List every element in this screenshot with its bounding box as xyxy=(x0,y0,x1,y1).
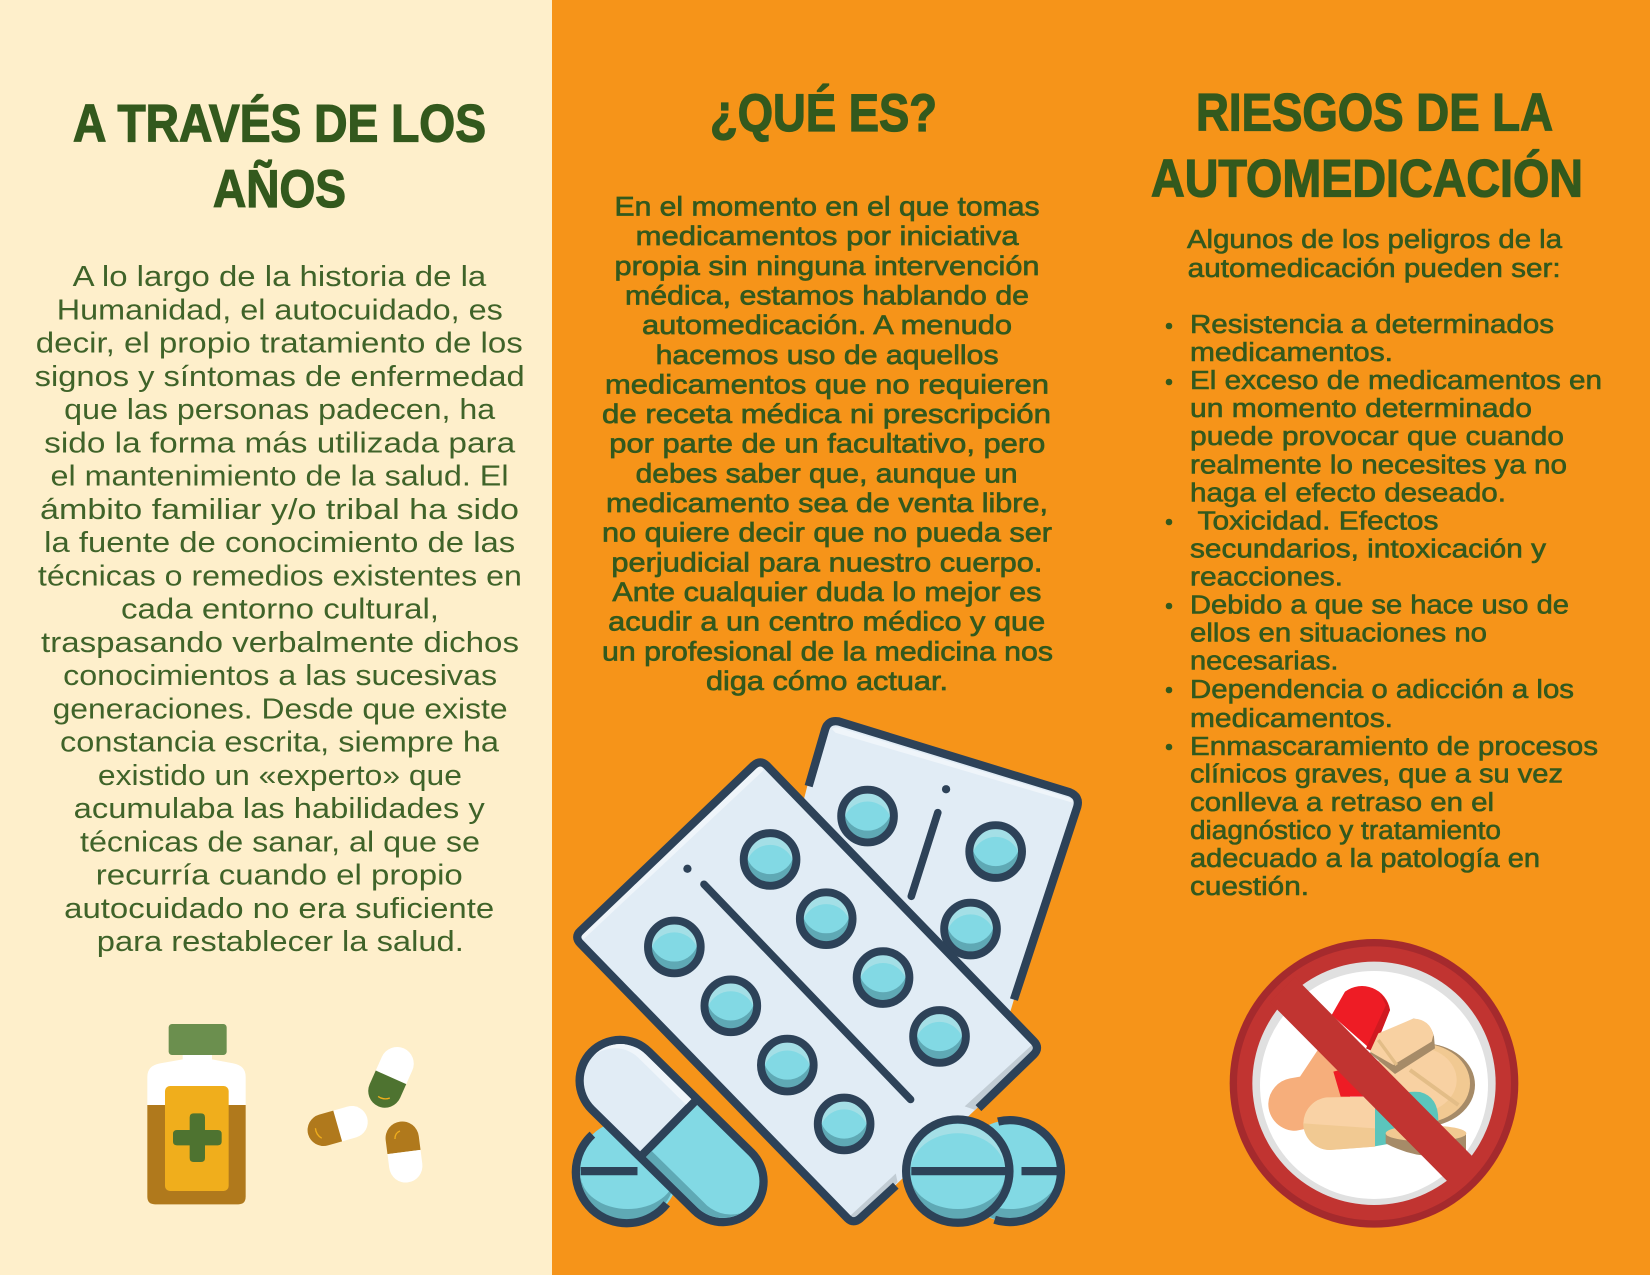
text block: history: técnicas o remedios existentes en xyxy=(38,560,522,592)
text block: definition: En el momento en el que tomas xyxy=(614,192,1040,222)
text block: history: conocimientos a las sucesivas xyxy=(63,660,497,692)
text block: history: cada entorno cultural, xyxy=(121,594,439,626)
front blister pack xyxy=(577,762,1037,1221)
list: risks: necesarias. xyxy=(1190,648,1338,676)
text block: history: sido la forma más utilizada para xyxy=(44,427,515,459)
list: risks: cuestión. xyxy=(1190,873,1309,901)
list: risks: adecuado a la patología en xyxy=(1190,845,1540,873)
list: risks: un momento determinado xyxy=(1190,395,1532,423)
capsule xyxy=(557,1017,786,1245)
text block: history: ámbito familiar y/o tribal ha sido xyxy=(40,494,519,526)
text block: intro to risks: automedicación pueden ser: xyxy=(1188,255,1561,283)
heading: a través de los años xyxy=(73,94,486,219)
right back tablet xyxy=(960,1120,1061,1222)
text block: history: técnicas de sanar, al que se xyxy=(80,826,480,858)
icon: no pills prohibition sign xyxy=(1230,939,1518,1228)
list: risks: Debido a que se hace uso de xyxy=(1190,592,1569,620)
text block: history: la fuente de conocimiento de las xyxy=(44,527,515,559)
text block: definition: automedicación. A menudo xyxy=(642,310,1012,340)
text block: definition: medicamento sea de venta libre, xyxy=(606,488,1048,518)
list: risks: medicamentos. xyxy=(1190,705,1393,733)
right front tablet xyxy=(906,1119,1009,1223)
list: risks: secundarios, intoxicación y xyxy=(1190,536,1546,564)
list: risks: reacciones. xyxy=(1190,564,1343,592)
list: risks: haga el efecto deseado. xyxy=(1190,479,1506,507)
text block: history: acumulaba las habilidades y xyxy=(74,793,486,825)
text block: history: generaciones. Desde que existe xyxy=(53,693,508,725)
heading: riesgos de la automedicación: RIESGOS DE LA xyxy=(1196,84,1553,142)
text block: definition: acudir a un centro médico y que xyxy=(608,607,1045,637)
text block: definition xyxy=(602,192,1053,696)
text block: history: recurría cuando el propio xyxy=(96,860,463,892)
icon: three capsules xyxy=(304,1042,424,1185)
text block: definition: no quiere decir que no pueda ser xyxy=(602,518,1052,548)
text block: definition: hacemos uso de aquellos xyxy=(656,340,999,370)
text block: definition: médica, estamos hablando de xyxy=(625,280,1029,310)
text block: definition: diga cómo actuar. xyxy=(706,666,948,696)
text block: definition: debes saber que, aunque un xyxy=(636,458,1018,488)
text block: history: constancia escrita, siempre ha xyxy=(60,726,499,758)
list: risks: realmente lo necesites ya no xyxy=(1190,451,1567,479)
list: risks: Dependencia o adicción a los xyxy=(1190,676,1574,704)
text block: history: traspasando verbalmente dichos xyxy=(41,627,519,659)
heading: a través de los años: AÑOS xyxy=(213,159,346,219)
list: risks: Resistencia a determinados xyxy=(1190,311,1554,339)
text block: definition: medicamentos por iniciativa xyxy=(636,221,1020,251)
text block: definition: Ante cualquier duda lo mejor es xyxy=(612,577,1041,607)
text block: history: existido un «experto» que xyxy=(98,760,462,792)
text block: history: decir, el propio tratamiento de los xyxy=(36,328,523,360)
text block: definition: perjudicial para nuestro cuerpo. xyxy=(611,547,1042,577)
icon: medicine bottle xyxy=(147,1024,246,1204)
list: risks: El exceso de medicamentos en xyxy=(1190,367,1602,395)
text block: history: para restablecer la salud. xyxy=(97,926,464,958)
text block: definition: medicamentos que no requieren xyxy=(605,369,1049,399)
list: risks: medicamentos. xyxy=(1190,339,1393,367)
text block: definition: por parte de un facultativo, pero xyxy=(609,429,1045,459)
list: risks: puede provocar que cuando xyxy=(1190,423,1564,451)
list: risks: Enmascaramiento de procesos xyxy=(1190,733,1598,761)
text block: history xyxy=(35,261,525,958)
text block: definition: propia sin ninguna intervención xyxy=(614,251,1040,281)
list: risks: conlleva a retraso en el xyxy=(1190,789,1494,817)
text block: history: autocuidado no era suficiente xyxy=(64,893,494,925)
panel: orange background xyxy=(552,0,1650,1275)
heading: riesgos de la automedicación: AUTOMEDICACIÓN xyxy=(1151,148,1583,208)
panel: left cream background xyxy=(0,0,552,1275)
back blister pack xyxy=(801,721,1078,1020)
icon: blister packs, capsule and tablets xyxy=(557,721,1078,1245)
text block: intro to risks: Algunos de los peligros de la xyxy=(1187,226,1563,254)
list: risks: ellos en situaciones no xyxy=(1190,620,1487,648)
heading: a través de los años: A TRAVÉS DE LOS xyxy=(73,94,486,154)
text block: definition: un profesional de la medicina nos xyxy=(602,636,1053,666)
text block: definition: de receta médica ni prescripción xyxy=(602,399,1051,429)
list: risks: clínicos graves, que a su vez xyxy=(1190,761,1563,789)
list: risks xyxy=(1166,311,1602,901)
heading: riesgos de la automedicación xyxy=(1151,84,1583,208)
text block: history: A lo largo de la historia de la xyxy=(73,261,486,293)
text block: history: que las personas padecen, ha xyxy=(64,394,495,426)
list: risks: diagnóstico y tratamiento xyxy=(1190,817,1501,845)
text block: history: Humanidad, el autocuidado, es xyxy=(57,294,503,326)
text block: history: signos y síntomas de enfermedad xyxy=(35,361,525,393)
text block: intro to risks xyxy=(1187,226,1563,283)
text block: history: el mantenimiento de la salud. El xyxy=(50,460,508,492)
list: risks: Toxicidad. Efectos xyxy=(1198,507,1438,535)
heading: qué es: ¿QUÉ ES? xyxy=(710,83,937,143)
left tablet xyxy=(576,1120,679,1223)
